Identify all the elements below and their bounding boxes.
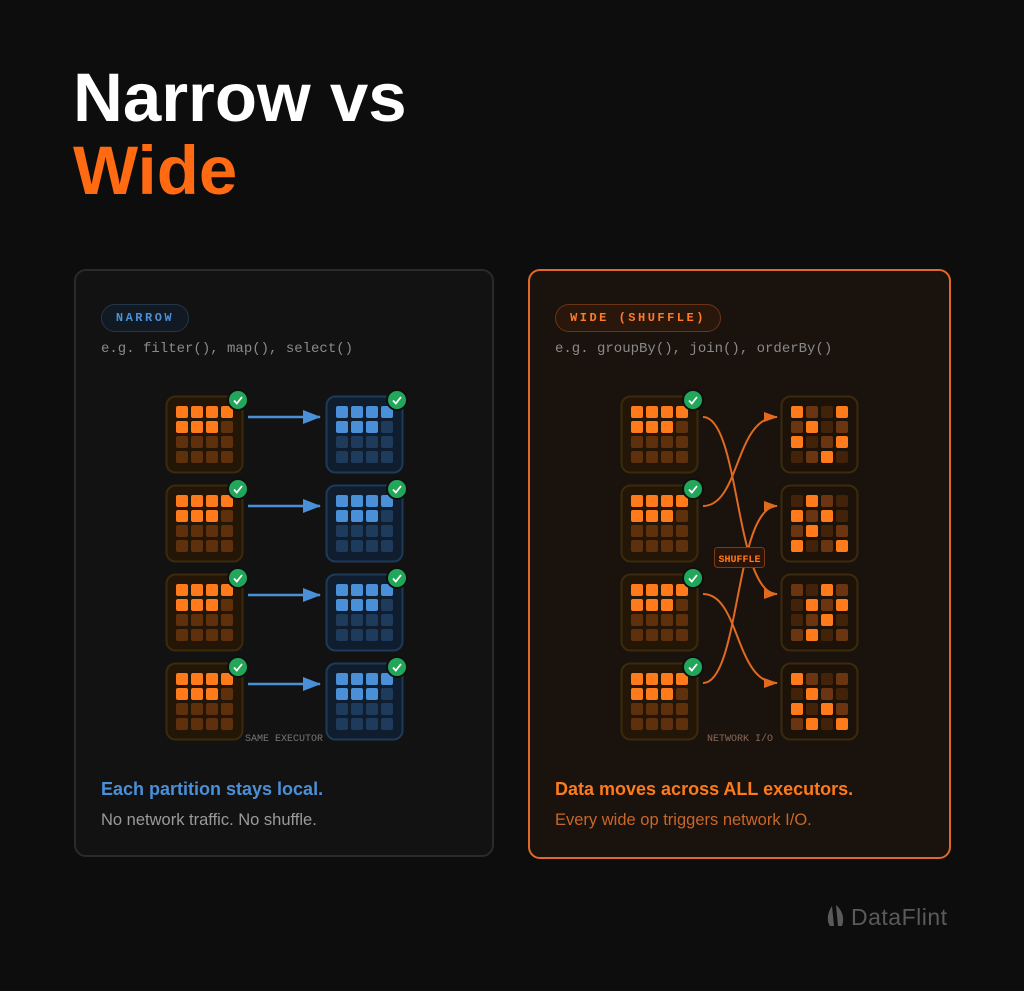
title: Wide — [73, 132, 237, 209]
subcaption narrow: No network traffic. No shuffle. — [101, 811, 317, 829]
panel: narrow — [74, 269, 494, 857]
badge: narrow: NARROW — [116, 311, 174, 325]
badge: narrow — [101, 304, 189, 332]
caption wide: Data moves across ALL executors. — [555, 779, 853, 799]
wide diagram — [622, 390, 858, 745]
wide diagram: NETWORK I/O — [707, 733, 773, 745]
title: Narrow vs — [73, 59, 407, 136]
narrow diagram: SAME EXECUTOR — [245, 734, 323, 745]
shuffle curves — [703, 417, 777, 683]
narrow diagram — [166, 390, 407, 745]
badge: wide — [555, 304, 721, 332]
logo: DataFlint — [851, 904, 948, 930]
caption narrow: Each partition stays local. — [101, 779, 323, 799]
badge: wide: WIDE (SHUFFLE) — [570, 311, 706, 325]
examples wide: e.g. groupBy(), join(), orderBy() — [555, 341, 832, 357]
examples narrow: e.g. filter(), map(), select() — [101, 341, 353, 357]
shuffle label — [714, 548, 764, 568]
title — [73, 59, 407, 209]
shuffle label: SHUFFLE — [718, 555, 761, 566]
panel: wide — [528, 269, 951, 859]
subcaption wide: Every wide op triggers network I/O. — [555, 811, 812, 829]
